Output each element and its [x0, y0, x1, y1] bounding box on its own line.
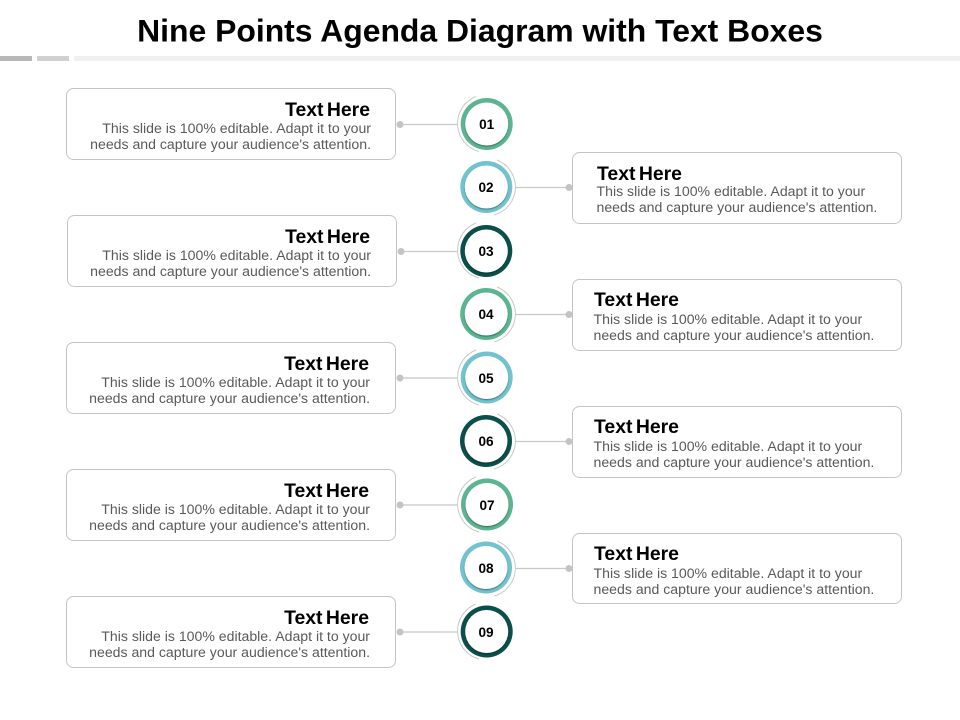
agenda item 09: Text Here: [284, 607, 369, 629]
agenda item 02: [460, 152, 902, 224]
agenda item 07: [66, 470, 513, 540]
agenda item 06: 06: [478, 434, 494, 449]
agenda item 06: [460, 406, 902, 478]
agenda item 07: This slide is 100% editable. Adapt it to your: [101, 501, 370, 517]
agenda item 09: This slide is 100% editable. Adapt it to your: [101, 628, 370, 644]
title: Nine Points Agenda Diagram with Text Boxes: [137, 12, 823, 48]
header divider bar: [0, 56, 960, 61]
agenda item 01: Text Here: [285, 99, 370, 121]
agenda item 03: This slide is 100% editable. Adapt it to your: [102, 247, 371, 263]
agenda item 03: needs and capture your audience's attention.: [90, 263, 371, 279]
agenda item 08: needs and capture your audience's attention.: [594, 581, 874, 597]
agenda item 09: needs and capture your audience's attention.: [89, 644, 370, 660]
agenda item 08: Text Here: [594, 543, 679, 565]
agenda item 01: [66, 88, 513, 160]
agenda item 02: 02: [478, 180, 494, 195]
agenda item 03: Text Here: [285, 226, 370, 248]
agenda item 07: 07: [479, 498, 495, 513]
agenda item 05: [66, 342, 513, 414]
agenda item 08: 08: [478, 561, 494, 576]
agenda item 05: needs and capture your audience's attention.: [89, 390, 370, 406]
agenda item 02: This slide is 100% editable. Adapt it to your: [596, 183, 866, 199]
agenda item 07: needs and capture your audience's attention.: [89, 517, 370, 533]
agenda item 04: This slide is 100% editable. Adapt it to your: [594, 311, 863, 327]
agenda item 01: 01: [479, 117, 495, 132]
agenda item 04: needs and capture your audience's attention.: [594, 327, 874, 343]
agenda item 06: Text Here: [594, 416, 679, 438]
agenda item 08: This slide is 100% editable. Adapt it to your: [594, 565, 863, 581]
agenda item 05: This slide is 100% editable. Adapt it to your: [101, 374, 370, 390]
agenda item 04: [460, 280, 902, 350]
agenda item 01: This slide is 100% editable. Adapt it to your: [102, 120, 371, 136]
agenda item 09: 09: [478, 625, 494, 640]
agenda item 05: 05: [478, 371, 494, 386]
agenda item 04: 04: [478, 307, 494, 322]
agenda item 01: needs and capture your audience's attention.: [90, 136, 371, 152]
agenda item 07: Text Here: [284, 480, 369, 502]
agenda item 05: Text Here: [284, 353, 369, 375]
agenda item 08: [460, 534, 902, 604]
agenda item 02: needs and capture your audience's attention.: [596, 199, 877, 215]
agenda item 04: Text Here: [594, 289, 679, 311]
agenda item 03: [68, 216, 512, 286]
agenda item 09: [66, 596, 513, 668]
agenda item 06: needs and capture your audience's attention.: [594, 454, 874, 470]
agenda item 03: 03: [478, 244, 494, 259]
agenda item 06: This slide is 100% editable. Adapt it to your: [594, 438, 863, 454]
agenda item 02: Text Here: [597, 163, 682, 185]
